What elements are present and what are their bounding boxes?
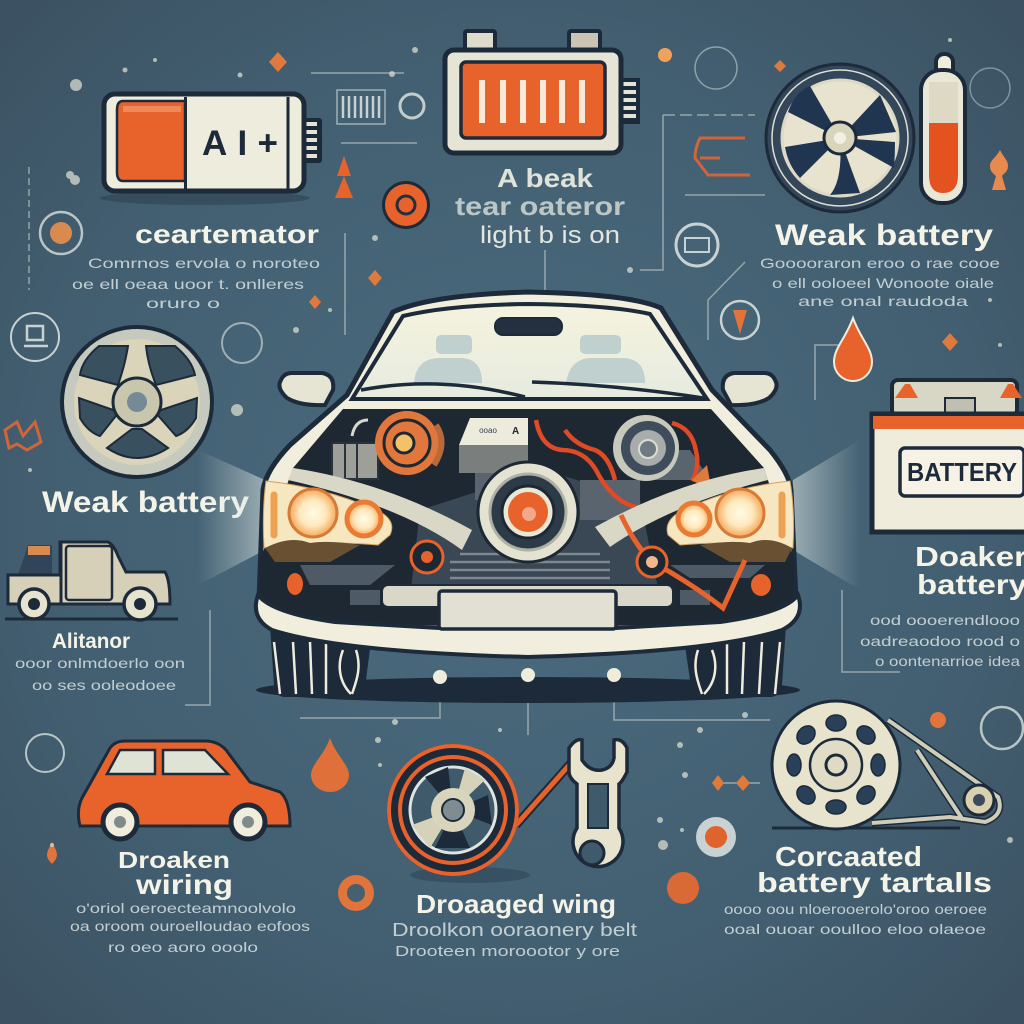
icon: drive belt spiral <box>387 744 571 883</box>
text block: doaker battery: ood oooerendlooo <box>870 612 1020 628</box>
text block: Comrnos ervola o noroteo <box>88 255 320 271</box>
headlight right <box>595 468 794 562</box>
orange cable right <box>621 515 745 608</box>
heading: weak battery top right: ane onal raudoda <box>798 293 968 309</box>
ground shadow <box>256 677 800 703</box>
text block: broken wiring: Droaken <box>118 847 230 873</box>
heading: weak battery top right <box>760 219 1000 309</box>
text block: doaker battery: o oontenarrioe idea <box>875 653 1020 669</box>
bumper <box>256 595 800 657</box>
heading: ceartemator: ceartemator <box>135 219 319 249</box>
text block: corroded terminals: ooal ouoar ooulloo eloo olaeoe <box>724 921 986 937</box>
headlight left <box>263 468 472 562</box>
icon: battery right <box>872 380 1024 532</box>
heading: weak battery top right: o ell ooloeel Wonoote oiale <box>772 275 994 291</box>
bumper strip <box>382 585 673 607</box>
heading: warning text centre: tear oateror <box>455 191 625 221</box>
text block: broken wiring: ro oeo aoro ooolo <box>108 939 258 955</box>
red wires <box>536 420 697 508</box>
wipers <box>361 382 703 398</box>
text block: doaker battery: oadreaodoo rood o <box>860 633 1020 649</box>
engine bay <box>260 409 794 625</box>
body shell <box>259 292 796 615</box>
seats <box>414 335 645 383</box>
metal pulley <box>613 415 679 481</box>
central pulley <box>478 462 578 562</box>
fuse box <box>459 418 528 473</box>
text block: alternator: ooor onlmdoerlo oon <box>15 655 185 671</box>
icon: fan wheel top right <box>766 64 914 212</box>
text block: broken wiring: o'oriol oeroecteamnoolvolo <box>76 900 296 916</box>
heading: weak battery left: Weak battery <box>42 486 249 519</box>
icon: oil drop <box>834 318 872 381</box>
text block: damaged wiring: Droaaged wing <box>416 889 616 919</box>
text block: corroded terminals: oooo oou nloerooerolo'oroo oeroee <box>724 901 987 917</box>
rear view mirror <box>495 318 562 335</box>
fuse box: A <box>512 426 519 437</box>
battery label: BATTERY <box>907 457 1017 487</box>
text block: broken wiring: wiring <box>135 869 233 900</box>
heading: warning text centre: A beak <box>497 163 594 193</box>
orange pulley <box>375 411 442 475</box>
icon: belt pulley <box>772 701 1000 829</box>
text block: damaged wiring: Droolkon ooraonery belt <box>392 920 637 940</box>
text block: corroded terminals <box>724 841 992 937</box>
text block: doaker battery: battery <box>917 569 1024 600</box>
text block: corroded terminals: Corcaated <box>775 841 922 872</box>
side mirrors <box>279 373 333 405</box>
icon: alloy wheel left <box>60 325 214 479</box>
number plate <box>439 591 616 629</box>
icon: battery top left <box>100 94 322 205</box>
text block: corroded terminals: battery tartalls <box>757 867 992 898</box>
text block: damaged wiring: Drooteen moroootor y ore <box>395 943 620 960</box>
car <box>256 292 800 703</box>
pins under car <box>433 668 621 684</box>
heading: weak battery top right: Weak battery <box>775 219 993 252</box>
icon: battery top centre <box>445 31 640 153</box>
fog lamps <box>287 573 303 595</box>
heading: warning text centre <box>455 163 625 249</box>
text block: doaker battery <box>860 541 1024 669</box>
icon: orange drop <box>311 738 349 792</box>
text block: alternator <box>15 630 185 693</box>
icon: thermometer tube <box>921 54 965 203</box>
icon: orange car <box>78 741 290 839</box>
icon: truck <box>5 542 178 620</box>
battery label: AI+ <box>202 124 278 163</box>
text block: doaker battery: Doaker <box>915 541 1024 572</box>
small ring left <box>411 541 443 573</box>
text block: damaged wiring <box>392 889 637 960</box>
icon: wrench <box>569 740 627 867</box>
fuse box: ooao <box>479 426 497 435</box>
text block: Gooooraron eroo o rae cooe <box>760 255 1000 271</box>
windshield <box>352 304 707 399</box>
connector lines <box>29 73 900 783</box>
heading: warning text centre: light b is on <box>480 222 620 249</box>
text block: alternator: Alitanor <box>52 630 130 653</box>
engine parts <box>300 420 765 605</box>
text block: broken wiring: oa oroom ouroelloudao eofoos <box>70 918 310 934</box>
heading: ceartemator: oruro o <box>146 295 220 311</box>
heading: ceartemator <box>72 219 320 311</box>
headlight beams <box>198 440 860 590</box>
heading: ceartemator: oe ell oeaa uoor t. onlleres <box>72 276 304 292</box>
scattered specks <box>28 38 1013 850</box>
tyres <box>270 625 786 697</box>
text block: alternator: oo ses ooleodoee <box>32 677 176 693</box>
text block: broken wiring <box>70 847 310 955</box>
